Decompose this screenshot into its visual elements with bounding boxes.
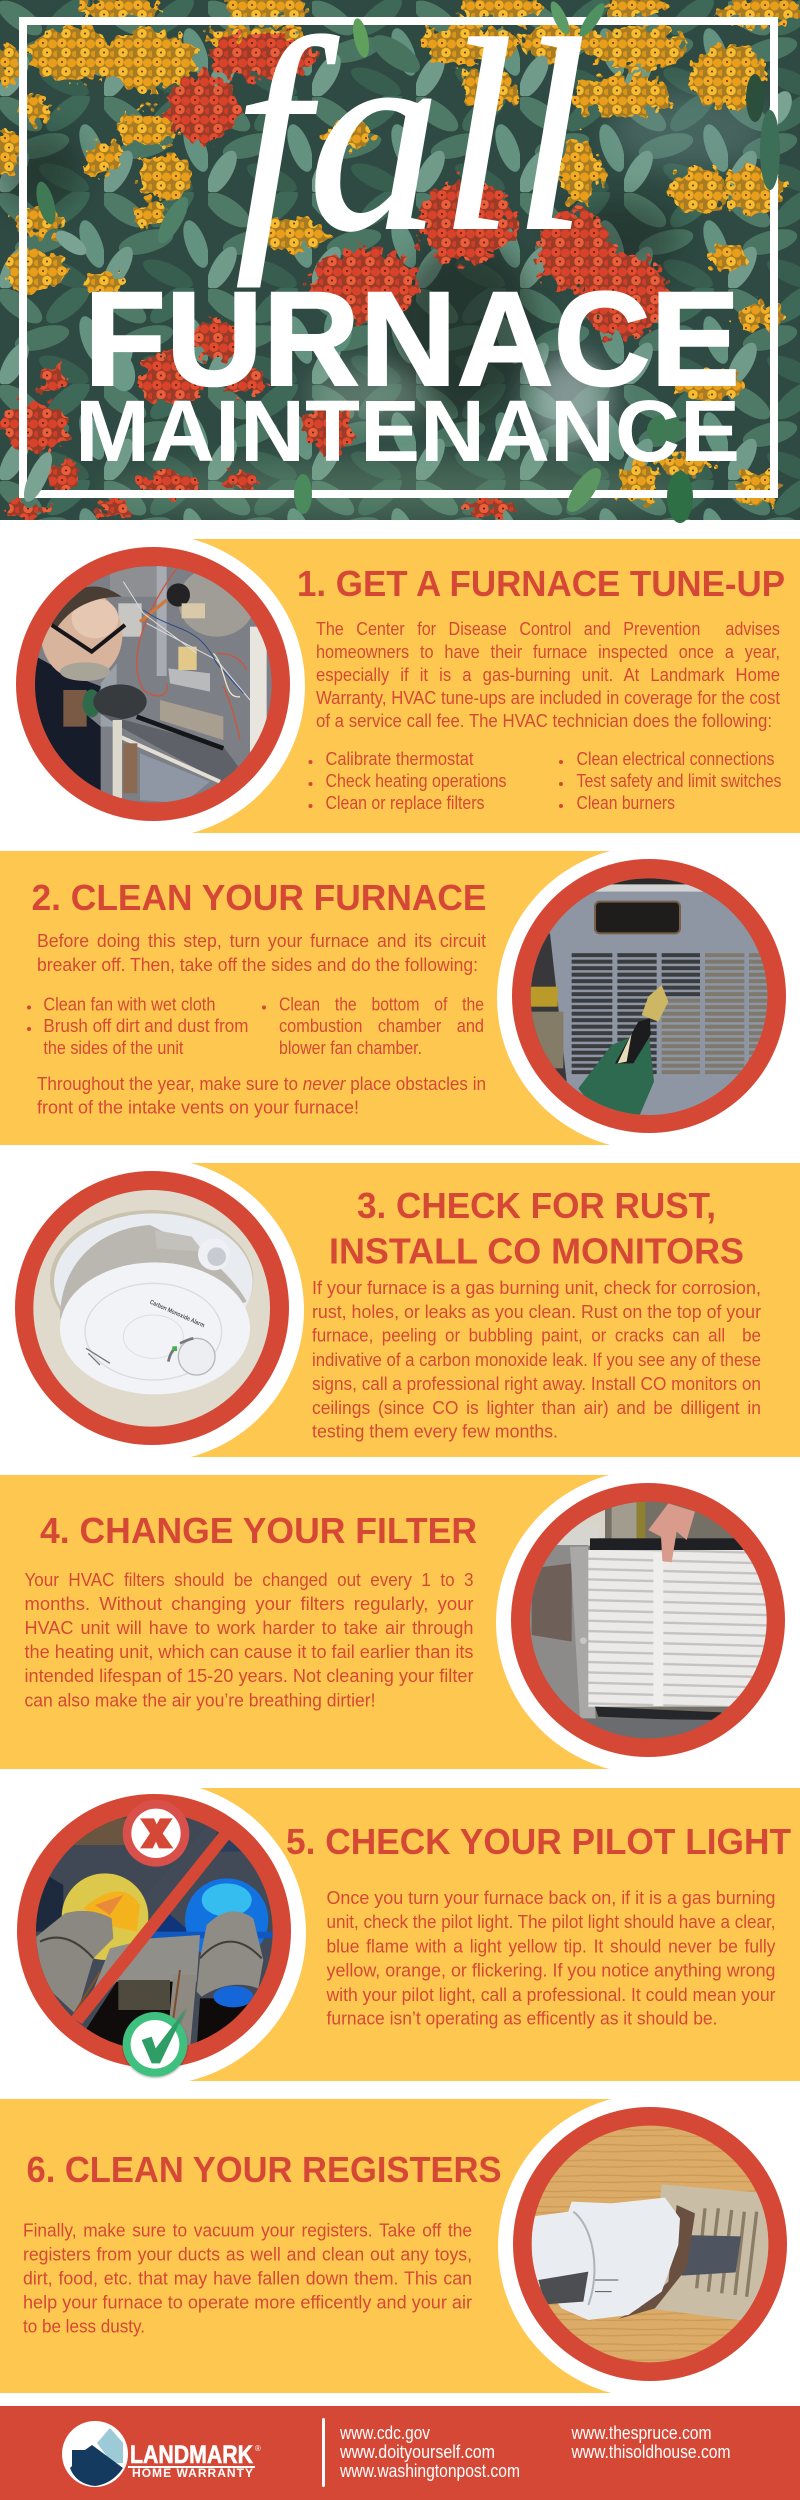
bullet list: right: Clean electrical connections — [576, 749, 774, 769]
bullet list: right: Clean burners — [576, 793, 675, 813]
band background — [153, 539, 800, 833]
icon: check badge — [123, 2008, 187, 2077]
slash — [71, 1829, 232, 2024]
frame-overlapping leaves — [18, 0, 780, 523]
circle cutout — [497, 846, 800, 1150]
bullet list: left: Check heating operations — [326, 771, 506, 791]
heading: INSTALL CO MONITORS — [329, 1230, 744, 1272]
bullet list: left: Clean fan with wet cloth — [43, 994, 215, 1014]
body text: unit, check the pilot light. The pilot light should have a clear, — [326, 1912, 776, 1932]
body text — [24, 1570, 474, 1710]
body text: months. Without changing your filters regularly, your — [24, 1594, 474, 1614]
photo ring — [17, 1794, 291, 2068]
body text: Once you turn your furnace back on, if it is a gas burning — [326, 1888, 776, 1908]
bullet list: left — [308, 749, 506, 813]
body text: of a service call fee. The HVAC technician does the following: — [316, 711, 772, 731]
body text: dirt, food, etc. that may have fallen down them. This can — [23, 2268, 472, 2288]
sources right: www.thespruce.com — [571, 2423, 712, 2443]
body text: with your pilot light, call a professional. It could mean your — [326, 1985, 776, 2005]
body text: help your furnace to operate more efficently and your air — [23, 2293, 472, 2313]
body text: Your HVAC filters should be changed out every 1 to 3 — [24, 1570, 474, 1590]
photo: carbon monoxide alarm — [30, 1185, 277, 1432]
body text — [23, 2220, 472, 2336]
photo: pilot light comparison — [36, 1816, 273, 2046]
photo: brushing furnace vents — [530, 878, 768, 1115]
sources left: www.cdc.gov — [339, 2423, 430, 2443]
title: furnace: FURNACE — [84, 265, 740, 414]
heading: 6. CLEAN YOUR REGISTERS — [26, 2149, 502, 2190]
circle cutout — [0, 1158, 304, 1462]
circle cutout — [496, 1470, 800, 1774]
body text: ceilings (since CO is lighter than air) and be dilligent in — [312, 1398, 761, 1418]
body text: yellow, orange, or flickering. If you notice anything wrong — [326, 1961, 776, 1981]
bullet list: right: blower fan chamber. — [279, 1038, 422, 1058]
panel: step 6 — [0, 2094, 800, 2398]
bullet list: left: Brush off dirt and dust from — [43, 1016, 248, 1036]
body text: signs, call a professional right away. Install CO monitors on — [312, 1374, 761, 1394]
heading: 4. CHANGE YOUR FILTER — [40, 1510, 477, 1551]
bullet list: left: Clean or replace filters — [326, 793, 484, 813]
circle cutout — [1, 534, 305, 838]
body text: HVAC unit will have to work harder to take air through — [24, 1618, 474, 1638]
heading: 5. CHECK YOUR PILOT LIGHT — [286, 1821, 791, 1862]
sources left: www.washingtonpost.com — [339, 2461, 520, 2481]
photo ring — [513, 2107, 787, 2381]
body text: registers from your ducts as well and clean out any toys, — [23, 2245, 472, 2265]
bullet list: left — [27, 994, 248, 1058]
header frame — [23, 21, 774, 494]
photo: technician at furnace — [30, 560, 277, 807]
heading: 3. CHECK FOR RUST, — [357, 1185, 716, 1226]
header panel — [0, 0, 800, 523]
band background — [0, 851, 649, 1145]
logo: Landmark Home Warranty: HOME WARRANTY — [132, 2466, 253, 2480]
body text: furnace isn’t operating as efficently as it should be. — [326, 2009, 718, 2029]
sources left: www.doityourself.com — [339, 2442, 495, 2462]
intro text — [37, 931, 486, 975]
body text — [316, 619, 780, 731]
photo ring — [512, 859, 786, 1133]
photo ring — [511, 1483, 785, 1757]
heading: 2. CLEAN YOUR FURNACE — [32, 877, 486, 918]
icon: X badge — [123, 1800, 189, 1867]
sources right: www.thisoldhouse.com — [571, 2442, 730, 2462]
body text: testing them every few months. — [312, 1422, 558, 1442]
photo ring — [15, 1171, 289, 1445]
photo: vacuum on register — [532, 2126, 768, 2362]
bullet list: left: Calibrate thermostat — [326, 749, 474, 769]
band background — [152, 1163, 800, 1457]
panel: step 5 — [2, 1781, 800, 2085]
body text: rust, holes, or leaks as you clean. Rust on the top of your — [312, 1302, 761, 1322]
heading — [329, 1185, 744, 1272]
panel: step 3 — [0, 1158, 800, 1462]
panel: step 4 — [0, 1470, 800, 1774]
intro text: breaker off. Then, take off the sides and do the following: — [37, 955, 478, 975]
closing text: Throughout the year, make sure to never place obstacles in — [37, 1074, 486, 1094]
circle cutout — [498, 2094, 800, 2398]
bullet list: left: the sides of the unit — [43, 1038, 183, 1058]
bullet list: right: combustion chamber and — [279, 1016, 484, 1036]
closing text — [37, 1074, 486, 1118]
body text: Finally, make sure to vacuum your registers. Take off the — [23, 2220, 472, 2240]
heading: 1. GET A FURNACE TUNE-UP — [297, 563, 785, 604]
bullet list: right — [262, 994, 484, 1058]
body text: can also make the air you’re breathing dirtier! — [24, 1690, 376, 1710]
sources left — [339, 2423, 520, 2481]
circle cutout — [2, 1781, 306, 2085]
divider line — [322, 2418, 325, 2487]
band background — [0, 1475, 648, 1769]
panel: step 2 — [0, 846, 800, 1150]
body text: the heating unit, which can cause it to fail earlier than its — [24, 1642, 474, 1662]
sources right — [571, 2423, 730, 2462]
body text: intended lifespan of 15-20 years. Not cleaning your filter — [24, 1666, 474, 1686]
body text — [326, 1888, 776, 2029]
title: maintenance: MAINTENANCE — [75, 383, 740, 480]
band background — [154, 1788, 800, 2081]
bullet list: right: Clean the bottom of the — [279, 994, 484, 1014]
body text: If your furnace is a gas burning unit, check for corrosion, — [312, 1278, 761, 1298]
alarm label: Carbon Monoxide Alarm — [149, 1299, 206, 1329]
body text — [312, 1278, 761, 1442]
intro text: Before doing this step, turn your furnace and its circuit — [37, 931, 486, 951]
logo: Landmark Home Warranty — [62, 2421, 261, 2487]
photo ring — [16, 547, 290, 821]
bullet list: right — [559, 749, 782, 813]
logo: Landmark Home Warranty: LANDMARK — [130, 2441, 253, 2469]
band background — [0, 2099, 650, 2393]
header photo: berries and leaves — [0, 0, 800, 520]
logo: Landmark Home Warranty: ® — [255, 2444, 261, 2453]
photo: air filter with hand — [530, 1502, 767, 1738]
panel: step 1 — [1, 534, 800, 838]
body text: blue flame with a light yellow tip. It should never be fully — [326, 1936, 776, 1956]
closing text: front of the intake vents on your furnace! — [37, 1098, 359, 1118]
body text: indivative of a carbon monoxide leak. If you see any of these — [312, 1350, 761, 1370]
footer — [0, 2406, 800, 2500]
footer background — [0, 2406, 800, 2500]
body text: to be less dusty. — [23, 2316, 145, 2336]
body text: furnace, peeling or bubbling paint, or cracks can all be — [312, 1326, 761, 1346]
